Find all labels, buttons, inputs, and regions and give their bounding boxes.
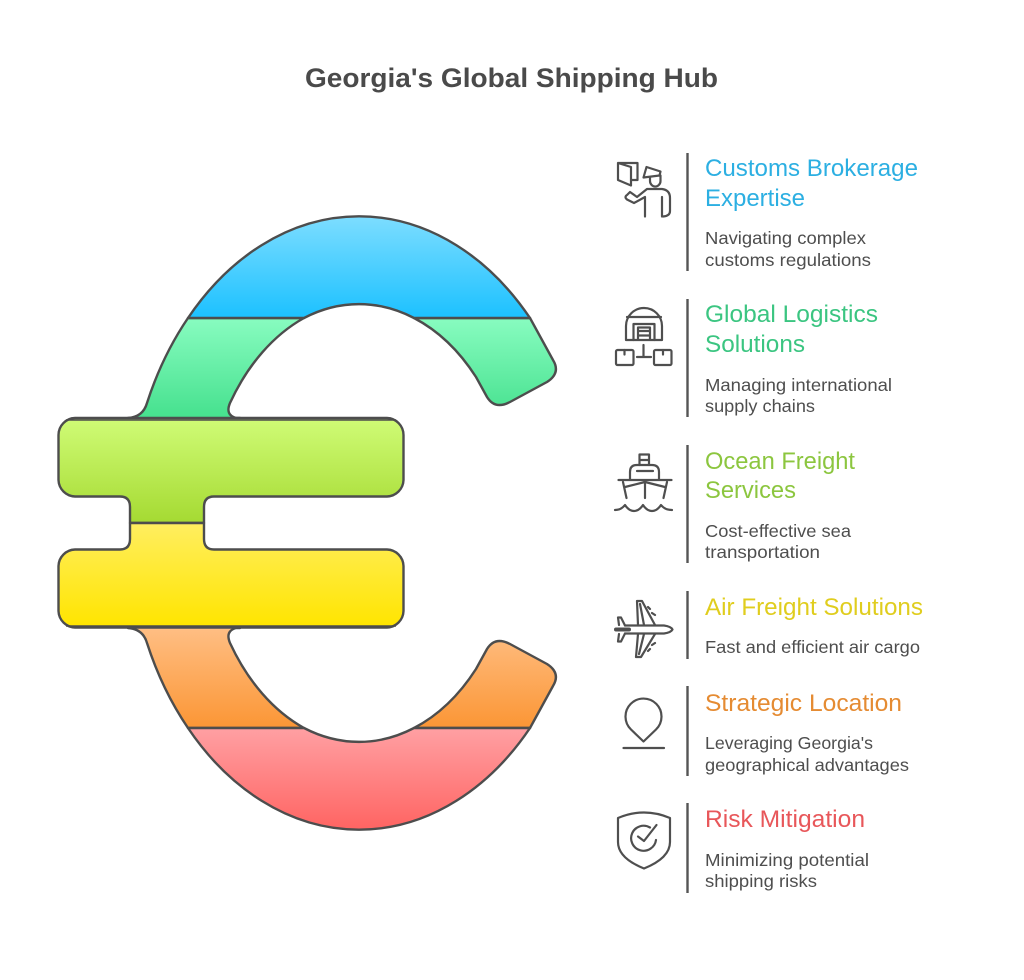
description line 2: customs regulations: [705, 250, 871, 270]
item: Global Logistics Solutions: [616, 299, 892, 417]
title: Georgia's Global Shipping Hub: [305, 63, 718, 93]
item: Ocean Freight Services: [615, 445, 855, 563]
heading line 2: Expertise: [705, 185, 805, 212]
heading line 2: Services: [705, 477, 796, 504]
description: Navigating complex: [705, 228, 866, 248]
description line 2: supply chains: [705, 396, 815, 416]
description: Leveraging Georgia's: [705, 733, 873, 753]
icon: customs officer: [618, 163, 670, 216]
heading: Air Freight Solutions: [705, 594, 923, 621]
heading: Customs Brokerage: [705, 155, 918, 182]
icon: warehouse with boxes: [616, 308, 672, 365]
icon: cargo ship: [615, 454, 672, 511]
description: Fast and efficient air cargo: [705, 637, 920, 657]
icon: map pin: [624, 699, 664, 748]
item: Strategic Location: [624, 686, 909, 776]
segment: blue top (Customs Brokerage): [188, 216, 530, 318]
heading: Risk Mitigation: [705, 806, 865, 833]
heading line 2: Solutions: [705, 331, 805, 358]
euro symbol chart: [58, 216, 556, 830]
description line 2: transportation: [705, 542, 820, 562]
description: Managing international: [705, 375, 892, 395]
description line 2: shipping risks: [705, 871, 817, 891]
description: Minimizing potential: [705, 850, 869, 870]
segment: red bottom (Risk Mitigation): [188, 728, 530, 830]
icon: shield with check: [618, 812, 670, 868]
heading: Global Logistics: [705, 301, 878, 328]
description: Cost-effective sea: [705, 521, 851, 541]
item: Air Freight Solutions: [616, 591, 923, 659]
description line 2: geographical advantages: [705, 755, 909, 775]
item: Customs Brokerage Expertise: [618, 153, 918, 271]
segment: yellow bar (Air Freight): [58, 523, 404, 628]
heading: Ocean Freight: [705, 448, 855, 475]
icon: airplane: [616, 601, 672, 657]
segment: green upper (Global Logistics): [128, 318, 556, 421]
segment: orange lower (Strategic Location): [128, 625, 556, 728]
item: Risk Mitigation: [618, 803, 869, 893]
segment: lime bar (Ocean Freight): [58, 418, 404, 523]
heading: Strategic Location: [705, 690, 902, 717]
